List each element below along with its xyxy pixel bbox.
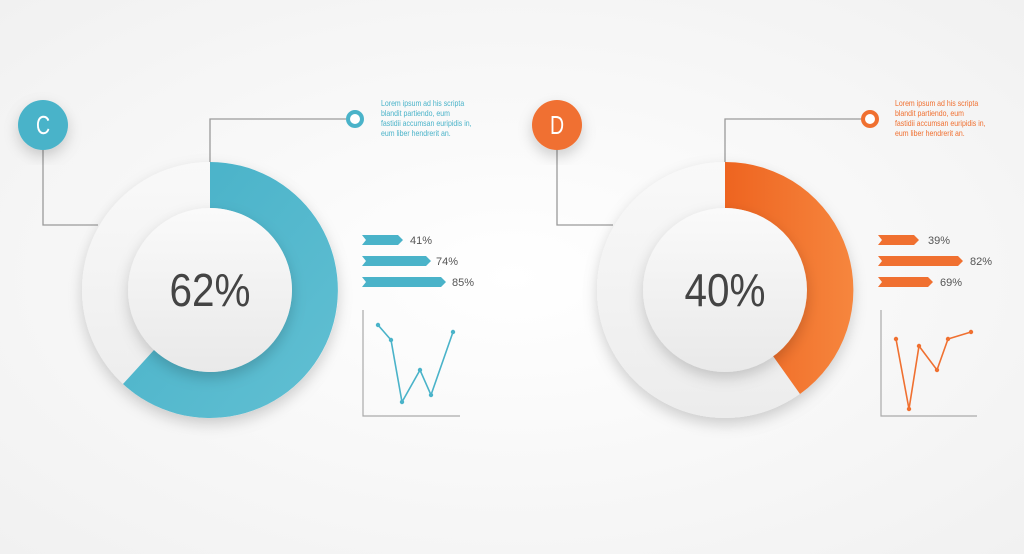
bar chart D: 39% — [928, 235, 950, 247]
bar chart C: 74% — [436, 256, 458, 268]
donut chart 40% — [597, 162, 853, 418]
text block D: Lorem ipsum ad his scripta — [895, 98, 979, 108]
text block C: eum liber hendrerit an. — [381, 128, 451, 138]
icon: C badge: C — [36, 110, 50, 140]
icon: D badge — [532, 100, 582, 150]
icon: D badge: D — [550, 110, 564, 140]
icon: C badge — [18, 100, 68, 150]
text block D: eum liber hendrerit an. — [895, 128, 965, 138]
icon: ring marker D — [863, 112, 877, 126]
text block C: Lorem ipsum ad his scripta — [381, 98, 465, 108]
donut chart 40%: 40% — [684, 266, 766, 317]
donut chart 62% — [82, 162, 338, 418]
connector lines D — [557, 119, 861, 225]
text block D: fastidii accumsan euripidis in, — [895, 118, 986, 128]
bar chart D: 69% — [940, 277, 962, 289]
text block D: blandit partiendo, eum — [895, 108, 964, 118]
text block C: blandit partiendo, eum — [381, 108, 450, 118]
bar chart D: 82% — [970, 256, 992, 268]
bar chart C — [362, 235, 474, 289]
line chart D — [881, 310, 977, 416]
line chart C — [363, 310, 460, 416]
panel: C — [18, 98, 474, 418]
icon: ring marker C — [348, 112, 362, 126]
text block C: fastidii accumsan euripidis in, — [381, 118, 472, 128]
connector lines C — [43, 119, 346, 225]
bar chart D — [878, 235, 992, 289]
bar chart C: 85% — [452, 277, 474, 289]
donut chart 62%: 62% — [169, 266, 251, 317]
panel: D — [532, 98, 992, 418]
bar chart C: 41% — [410, 235, 432, 247]
